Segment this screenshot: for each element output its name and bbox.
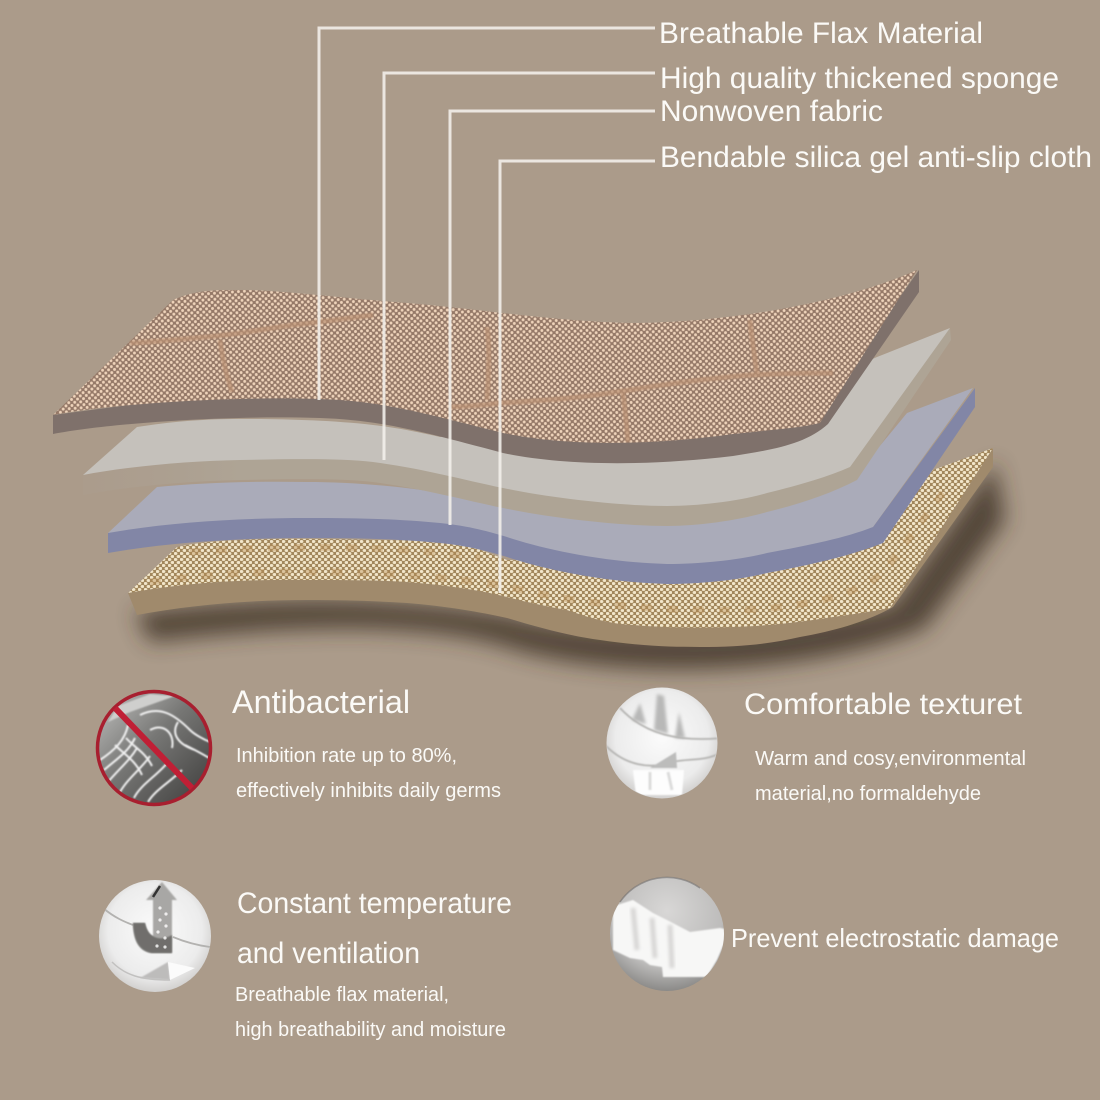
label: Nonwoven fabric: Nonwoven fabric [660,95,883,128]
description: high breathability and moisture [235,1019,506,1041]
layer 3: nonwoven fabric [108,388,975,584]
description [755,748,1026,805]
label: High quality thickened sponge: High quality thickened sponge [660,62,1059,95]
description: Inhibition rate up to 80%, [236,745,457,767]
description [235,984,506,1041]
layer 1: flax material [53,270,919,463]
drop shadow [135,462,1005,669]
layered material diagram [53,270,1005,669]
heading: Antibacterial [232,684,410,720]
feature: prevent electrostatic damage [610,877,1059,991]
heading, second line: and ventilation [237,937,420,970]
description: Breathable flax material, [235,984,449,1006]
cloth ring marks [150,490,945,610]
callout lines [319,28,655,593]
heading: Prevent electrostatic damage [731,923,1059,953]
label: Bendable silica gel anti-slip cloth: Bendable silica gel anti-slip cloth [660,141,1092,174]
fabric seams [130,315,833,442]
description: effectively inhibits daily germs [236,780,501,802]
icon: crossed out bacteria [98,692,212,804]
layer 2: thickened sponge [83,328,951,526]
feature: temperature and ventilation [99,880,512,1041]
heading: Comfortable texturet [744,688,1023,721]
description: Warm and cosy,environmental [755,748,1026,770]
icon: hook arrow airflow [99,880,211,992]
icon: fabric ball with spikes [606,688,722,798]
description: material,no formaldehyde [755,783,981,805]
feature: antibacterial [98,684,501,804]
label: Breathable Flax Material: Breathable Flax Material [659,17,983,50]
icon: folded fabric ball [610,877,730,991]
feature: comfortable texture [606,688,1026,805]
heading: Constant temperature [237,887,512,920]
layer 4: anti-slip cloth [128,448,993,647]
description [236,745,501,802]
